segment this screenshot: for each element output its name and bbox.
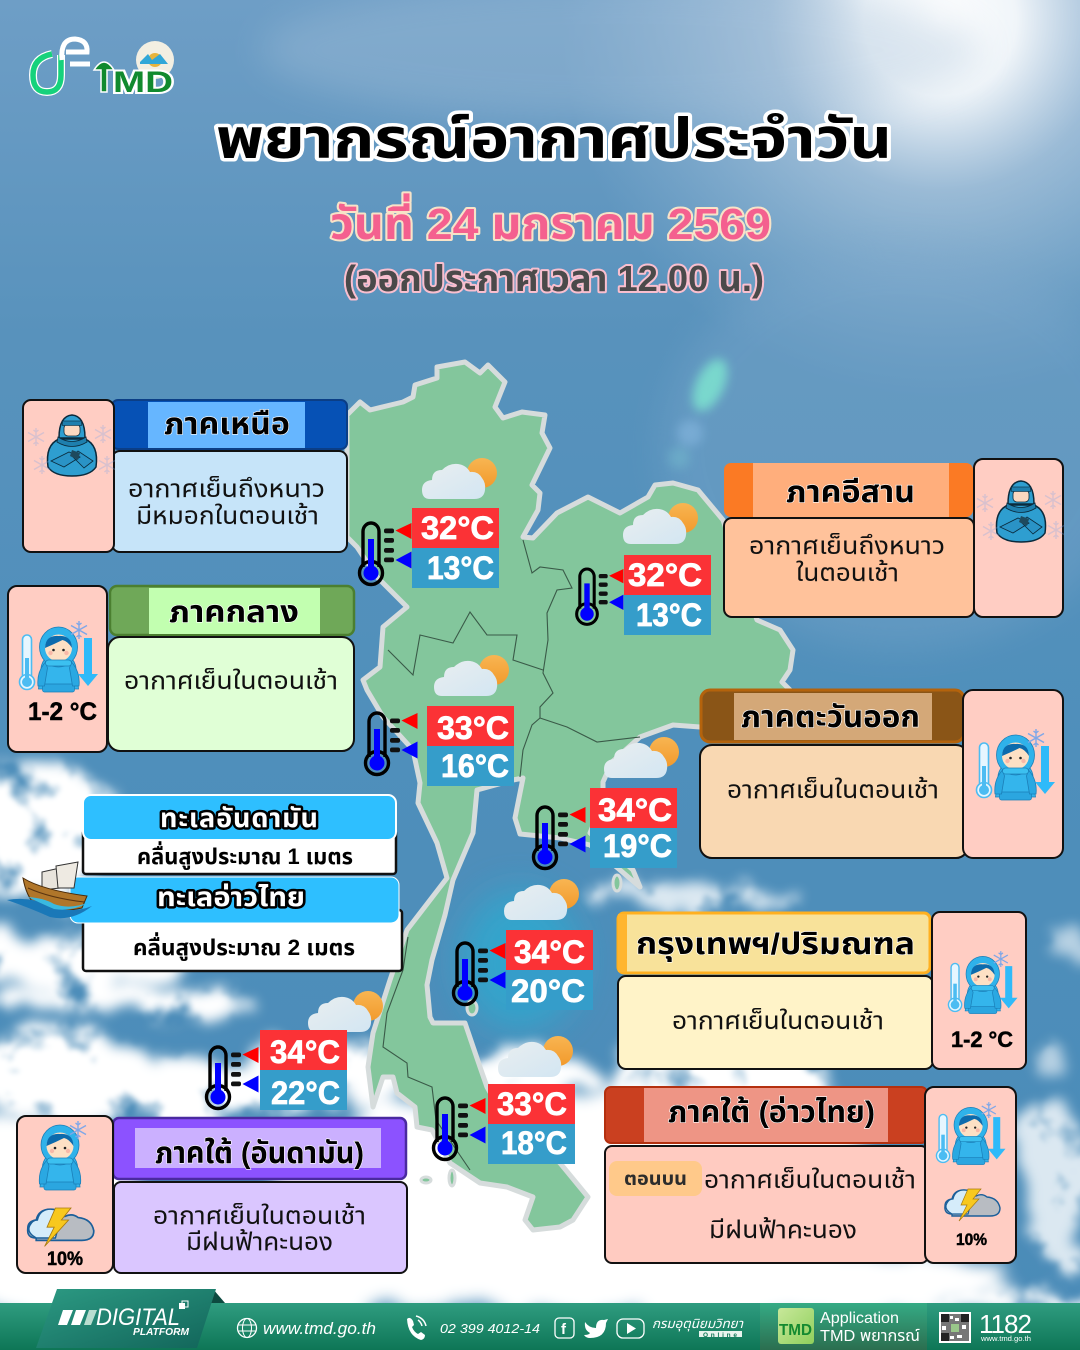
panel: Gulf of Thailand sea: [70, 877, 402, 971]
panel: Bangkok and vicinity: 1-2 °C: [951, 1027, 1013, 1052]
hotline: 1182: [979, 1309, 1032, 1339]
temperature: northeast: 32°C: [628, 557, 702, 593]
temperature: east: 34°C: [598, 792, 672, 828]
panel: east: [700, 690, 1063, 858]
weather icon: north: [422, 458, 497, 499]
panel: south andaman: อากาศเย็นในตอนเช้า: [153, 1202, 366, 1230]
social icons: [555, 1318, 644, 1338]
temperature: south andaman: 34°C: [270, 1034, 340, 1070]
temperature: south andaman: [206, 1030, 347, 1111]
panel: south gulf: 10%: [956, 1230, 987, 1249]
panel: Bangkok and vicinity: อากาศเย็นในตอนเช้า: [672, 1007, 884, 1035]
panel: south gulf: ตอนบน: [624, 1169, 687, 1190]
app tile: TMD พยากรณ์: [820, 1328, 920, 1345]
lens flare: [668, 354, 735, 469]
panel: northeast: อากาศเย็นถึงหนาว: [749, 532, 945, 560]
phone: [407, 1316, 540, 1340]
weather icon: northeast: [623, 503, 698, 544]
issue time: (ออกประกาศเวลา 12.00 น.): [344, 258, 764, 299]
panel: northeast: ในตอนเช้า: [796, 559, 899, 587]
app tile: [778, 1308, 920, 1345]
temperature: north: [360, 508, 499, 588]
temperature: northeast: [577, 555, 711, 635]
clouds background: [0, 760, 1080, 1316]
panel: northeast: ภาคอีสาน: [786, 476, 915, 509]
temperature: north: 13°C: [427, 550, 494, 586]
islands: [421, 875, 621, 1186]
panel: south andaman: [17, 1116, 407, 1273]
icon: ship: [7, 862, 92, 918]
panel: south gulf: มีฝนฟ้าคะนอง: [709, 1216, 857, 1244]
panel: Gulf of Thailand sea: คลื่นสูงประมาณ 2 เมตร: [133, 932, 355, 961]
temperature: south gulf lower: [434, 1084, 575, 1164]
logos: [33, 39, 174, 99]
panel: north: อากาศเย็นถึงหนาว: [128, 475, 325, 503]
temperature: east: [534, 788, 677, 868]
panel: south andaman: มีฝนฟ้าคะนอง: [186, 1228, 333, 1256]
title: พยากรณ์อากาศประจำวัน: [216, 107, 892, 170]
weather icon: south andaman: [308, 991, 383, 1032]
temperature: south gulf upper: 34°C: [514, 934, 585, 970]
panel: central: [8, 586, 354, 752]
panel: Bangkok and vicinity: [618, 912, 1026, 1069]
temperature: south andaman: 22°C: [271, 1075, 340, 1111]
digital platform tab: PLATFORM: [133, 1327, 190, 1338]
panel: north: [23, 400, 347, 552]
digital platform tab: [36, 1289, 225, 1348]
department name: Online: [703, 1332, 737, 1339]
temperature: central: 16°C: [441, 748, 509, 784]
panel: Gulf of Thailand sea: ทะเลอ่าวไทย: [157, 882, 305, 912]
app tile: TMD: [779, 1322, 812, 1339]
temperature: south gulf lower: 18°C: [501, 1125, 567, 1161]
app tile: Application: [820, 1310, 899, 1327]
panel: south andaman: 10%: [47, 1249, 83, 1270]
digital platform tab: DIGITAL: [96, 1304, 180, 1331]
temperature: east: 19°C: [603, 828, 672, 864]
temperature: south gulf lower: 33°C: [497, 1086, 567, 1122]
website: www.tmd.go.th: [263, 1319, 376, 1338]
panel: south andaman: ภาคใต้ (อันดามัน): [155, 1137, 364, 1170]
panel: north: ภาคเหนือ: [164, 408, 290, 441]
panel: east: อากาศเย็นในตอนเช้า: [727, 776, 939, 804]
temperature: central: [366, 706, 514, 786]
map of Thailand: [347, 362, 793, 1230]
temperature: south gulf upper: [454, 930, 593, 1010]
panel: central: อากาศเย็นในตอนเช้า: [124, 667, 338, 695]
panel: central: 1-2 °C: [28, 698, 97, 726]
date: วันที่ 24 มกราคม 2569: [330, 193, 771, 249]
panel: east: ภาคตะวันออก: [741, 701, 920, 734]
panel: Andaman sea: [83, 795, 396, 874]
department name: กรมอุตุนิยมวิทยา: [652, 1316, 744, 1332]
panel: central: ภาคกลาง: [169, 596, 299, 629]
department name: [652, 1316, 744, 1339]
panel: Andaman sea: คลื่นสูงประมาณ 1 เมตร: [137, 841, 353, 870]
weather icon: south gulf upper: [504, 879, 579, 920]
temperature: central: 33°C: [437, 710, 509, 746]
weather icon: east: [604, 737, 679, 778]
panel: Bangkok and vicinity: กรุงเทพฯ/ปริมณฑล: [636, 928, 915, 962]
temperature: south gulf upper: 20°C: [511, 973, 585, 1009]
panel: south gulf: [605, 1087, 1016, 1263]
QR code: [939, 1312, 971, 1343]
dense cloud bank: [0, 1080, 1020, 1325]
weather icon: south gulf lower: [498, 1036, 573, 1077]
temperature: northeast: 13°C: [636, 597, 702, 633]
hotline: www.tmd.go.th: [980, 1336, 1031, 1343]
panel: south gulf: อากาศเย็นในตอนเช้า: [704, 1166, 916, 1194]
panel: northeast: [724, 459, 1064, 617]
social icons: f: [561, 1321, 567, 1338]
logos: MD: [113, 66, 173, 99]
panel: Andaman sea: ทะเลอันดามัน: [160, 803, 318, 833]
panel: north: มีหมอกในตอนเช้า: [136, 502, 319, 530]
weather icon: central: [434, 655, 509, 696]
temperature: north: 32°C: [421, 510, 494, 546]
footer bar: [0, 1289, 1080, 1350]
panel: south gulf: ภาคใต้ (อ่าวไทย): [668, 1096, 875, 1129]
phone: 02 399 4012-14: [440, 1321, 540, 1336]
